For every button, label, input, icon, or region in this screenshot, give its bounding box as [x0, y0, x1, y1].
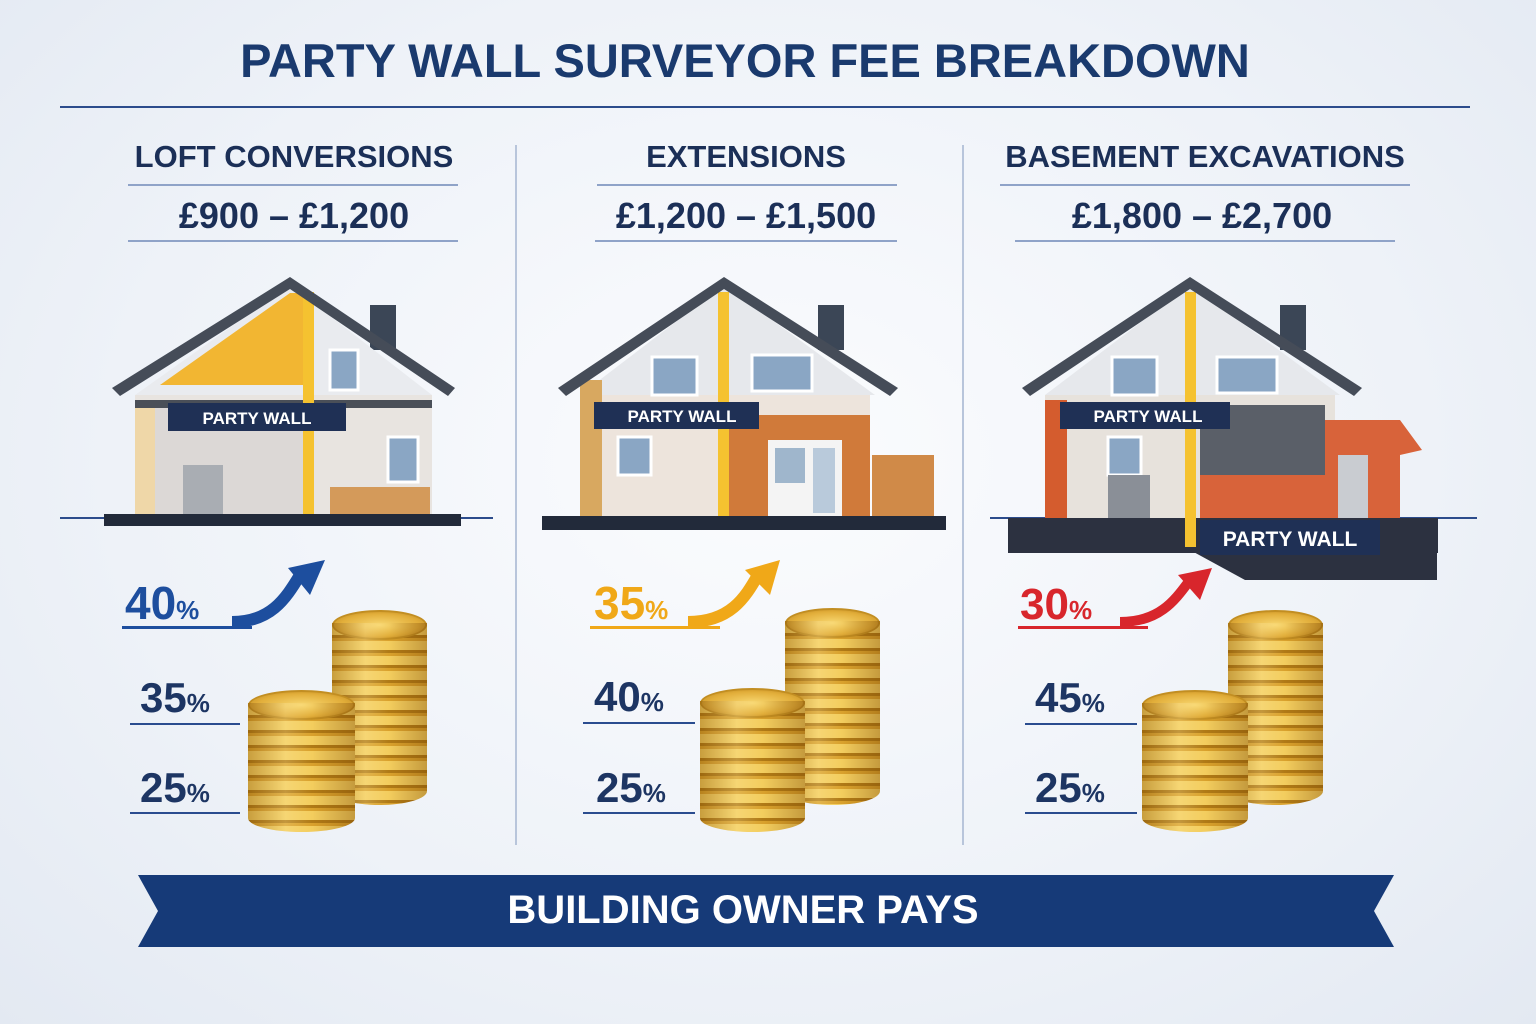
- price: basement: £1,800 – £2,700: [1072, 195, 1332, 236]
- banner: BUILDING OWNER PAYS: [507, 888, 979, 932]
- price: extensions: £1,200 – £1,500: [616, 195, 876, 236]
- coins: loft: [248, 610, 427, 832]
- arrow: basement up: [1120, 568, 1212, 622]
- percentages: loft: 40%: [125, 577, 199, 629]
- column heading: extensions: EXTENSIONS: [646, 139, 846, 174]
- percentages: extensions: 35%: [594, 577, 668, 629]
- arrow: loft up: [232, 560, 325, 622]
- percentages: extensions: 25%: [596, 764, 666, 811]
- house: loft: [60, 277, 493, 526]
- arrow: extension up: [688, 560, 780, 622]
- banner: [138, 875, 1394, 947]
- house: basement: [990, 277, 1477, 580]
- percentages: extensions: 40%: [594, 673, 664, 720]
- column heading: basement: BASEMENT EXCAVATIONS: [1005, 139, 1405, 174]
- house: extension: PARTY WALL: [628, 407, 736, 426]
- house: basement: PARTY WALL: [1223, 528, 1357, 551]
- coins: basement: [1142, 610, 1323, 832]
- percentages: basement: 25%: [1035, 764, 1105, 811]
- percentages: loft: [122, 577, 252, 814]
- percentages: basement: 30%: [1020, 580, 1092, 629]
- percentages: basement: 45%: [1035, 674, 1105, 721]
- percentages: extensions: [583, 577, 720, 814]
- price: loft: £900 – £1,200: [179, 195, 409, 236]
- house: loft: PARTY WALL: [203, 409, 311, 428]
- percentages: loft: 25%: [140, 764, 210, 811]
- coins: extensions: [700, 608, 880, 832]
- house: extension: [542, 277, 946, 530]
- house: basement: PARTY WALL: [1094, 407, 1202, 426]
- title: PARTY WALL SURVEYOR FEE BREAKDOWN: [240, 34, 1250, 87]
- percentages: loft: 35%: [140, 674, 210, 721]
- column heading: loft: LOFT CONVERSIONS: [135, 139, 453, 174]
